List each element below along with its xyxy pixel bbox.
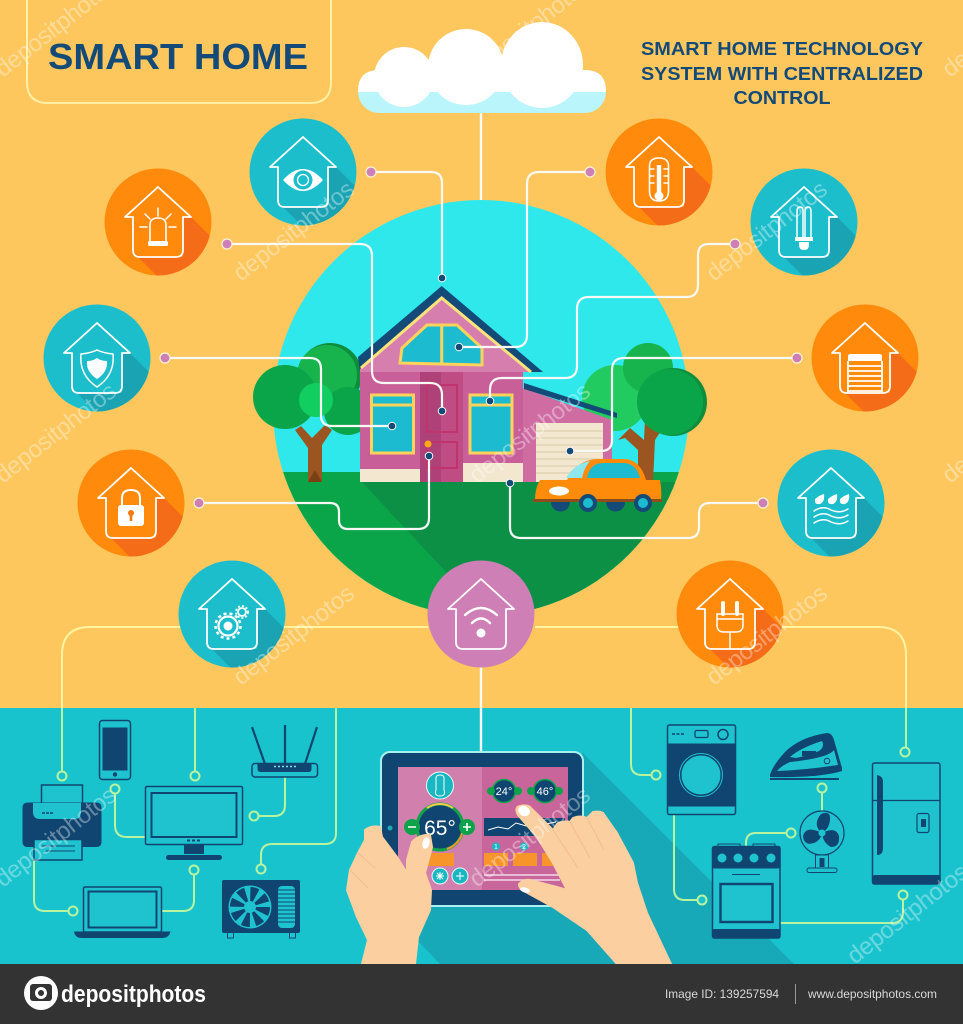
pink end dots [160, 167, 802, 508]
subtitle: SMART HOME TECHNOLOGY [641, 39, 923, 59]
watermarks: depositphotos [228, 580, 360, 691]
tablet with thermostat app [381, 752, 583, 906]
thermostat app: schedule bars [427, 853, 565, 866]
watermarks: depositphotos [701, 580, 833, 691]
right hand [516, 804, 671, 964]
icon: light bulb [750, 168, 858, 276]
thermostat app: numbered badges [492, 842, 528, 851]
background: yellow upper area [0, 0, 963, 708]
thermostat app: small dials: 46° [537, 786, 553, 798]
cloud to house connector [480, 113, 482, 205]
garage wing [523, 383, 617, 482]
footer logo: depositphotos [61, 981, 206, 1008]
icon: power plug [676, 560, 784, 668]
icon: television [146, 786, 242, 860]
icon: table fan [800, 811, 844, 872]
icon: printer [22, 785, 102, 860]
watermarks: depositphotos [464, 782, 596, 893]
thermostat app: thermometer badge [426, 772, 454, 799]
navy end dots [388, 274, 574, 487]
icon: stove and oven [712, 844, 780, 938]
icon: shield [44, 304, 150, 412]
icon: wifi router [252, 725, 318, 777]
icon: wifi hub [428, 560, 534, 668]
watermarks: depositphotos [228, 176, 360, 287]
icon: alarm siren [104, 168, 212, 276]
background: teal device area [0, 708, 963, 964]
tablet long shadow [383, 753, 794, 964]
icon: thermometer [606, 118, 712, 226]
footer image id and url: www.depositphotos.com [807, 987, 937, 1001]
left hand [347, 826, 432, 964]
icon: padlock [78, 450, 184, 556]
footer image id and url: Image ID: 139257594 [665, 987, 779, 1001]
subtitle [641, 39, 923, 108]
subtitle: SYSTEM WITH CENTRALIZED [641, 64, 923, 84]
icon: eye [250, 118, 356, 226]
icon: smartphone [100, 720, 130, 780]
icon: garage door [812, 304, 918, 412]
watermarks: depositphotos [464, 378, 596, 489]
left tree [253, 343, 372, 482]
icon: air conditioner unit [222, 880, 300, 938]
network lines to devices [34, 627, 906, 923]
device link rings [58, 748, 910, 916]
footer bar [0, 964, 963, 1024]
title frame and heading: SMART HOME [48, 36, 308, 77]
icon: gears [178, 560, 286, 668]
subtitle: CONTROL [734, 88, 830, 108]
main house [358, 286, 543, 482]
icon: laptop [74, 887, 170, 938]
car [533, 459, 662, 512]
thermostat app: small dials [487, 780, 563, 802]
footer logo [24, 976, 206, 1010]
thermostat app: main dial 65 degrees [404, 804, 475, 850]
icon: washing machine [668, 725, 736, 814]
thermostat app: mode buttons [432, 868, 468, 884]
right tree [582, 343, 707, 482]
sensor connection lines [165, 172, 797, 538]
title frame and heading [27, 0, 331, 103]
thermostat app: line chart [484, 818, 565, 836]
icon: refrigerator [872, 763, 940, 884]
thermostat app: numbered badges: 1 [494, 844, 498, 851]
thermostat app: small dials: 24° [496, 786, 512, 798]
central scene circle [274, 200, 688, 609]
watermarks: depositphotos [701, 176, 833, 287]
icon: clothes iron [770, 733, 842, 780]
thermostat app: main dial 65 degrees: 65° [424, 817, 456, 840]
thermostat app: numbered badges: 2 [522, 844, 526, 851]
icon: water [778, 450, 884, 556]
footer image id and url [665, 984, 937, 1004]
cloud [358, 22, 606, 113]
